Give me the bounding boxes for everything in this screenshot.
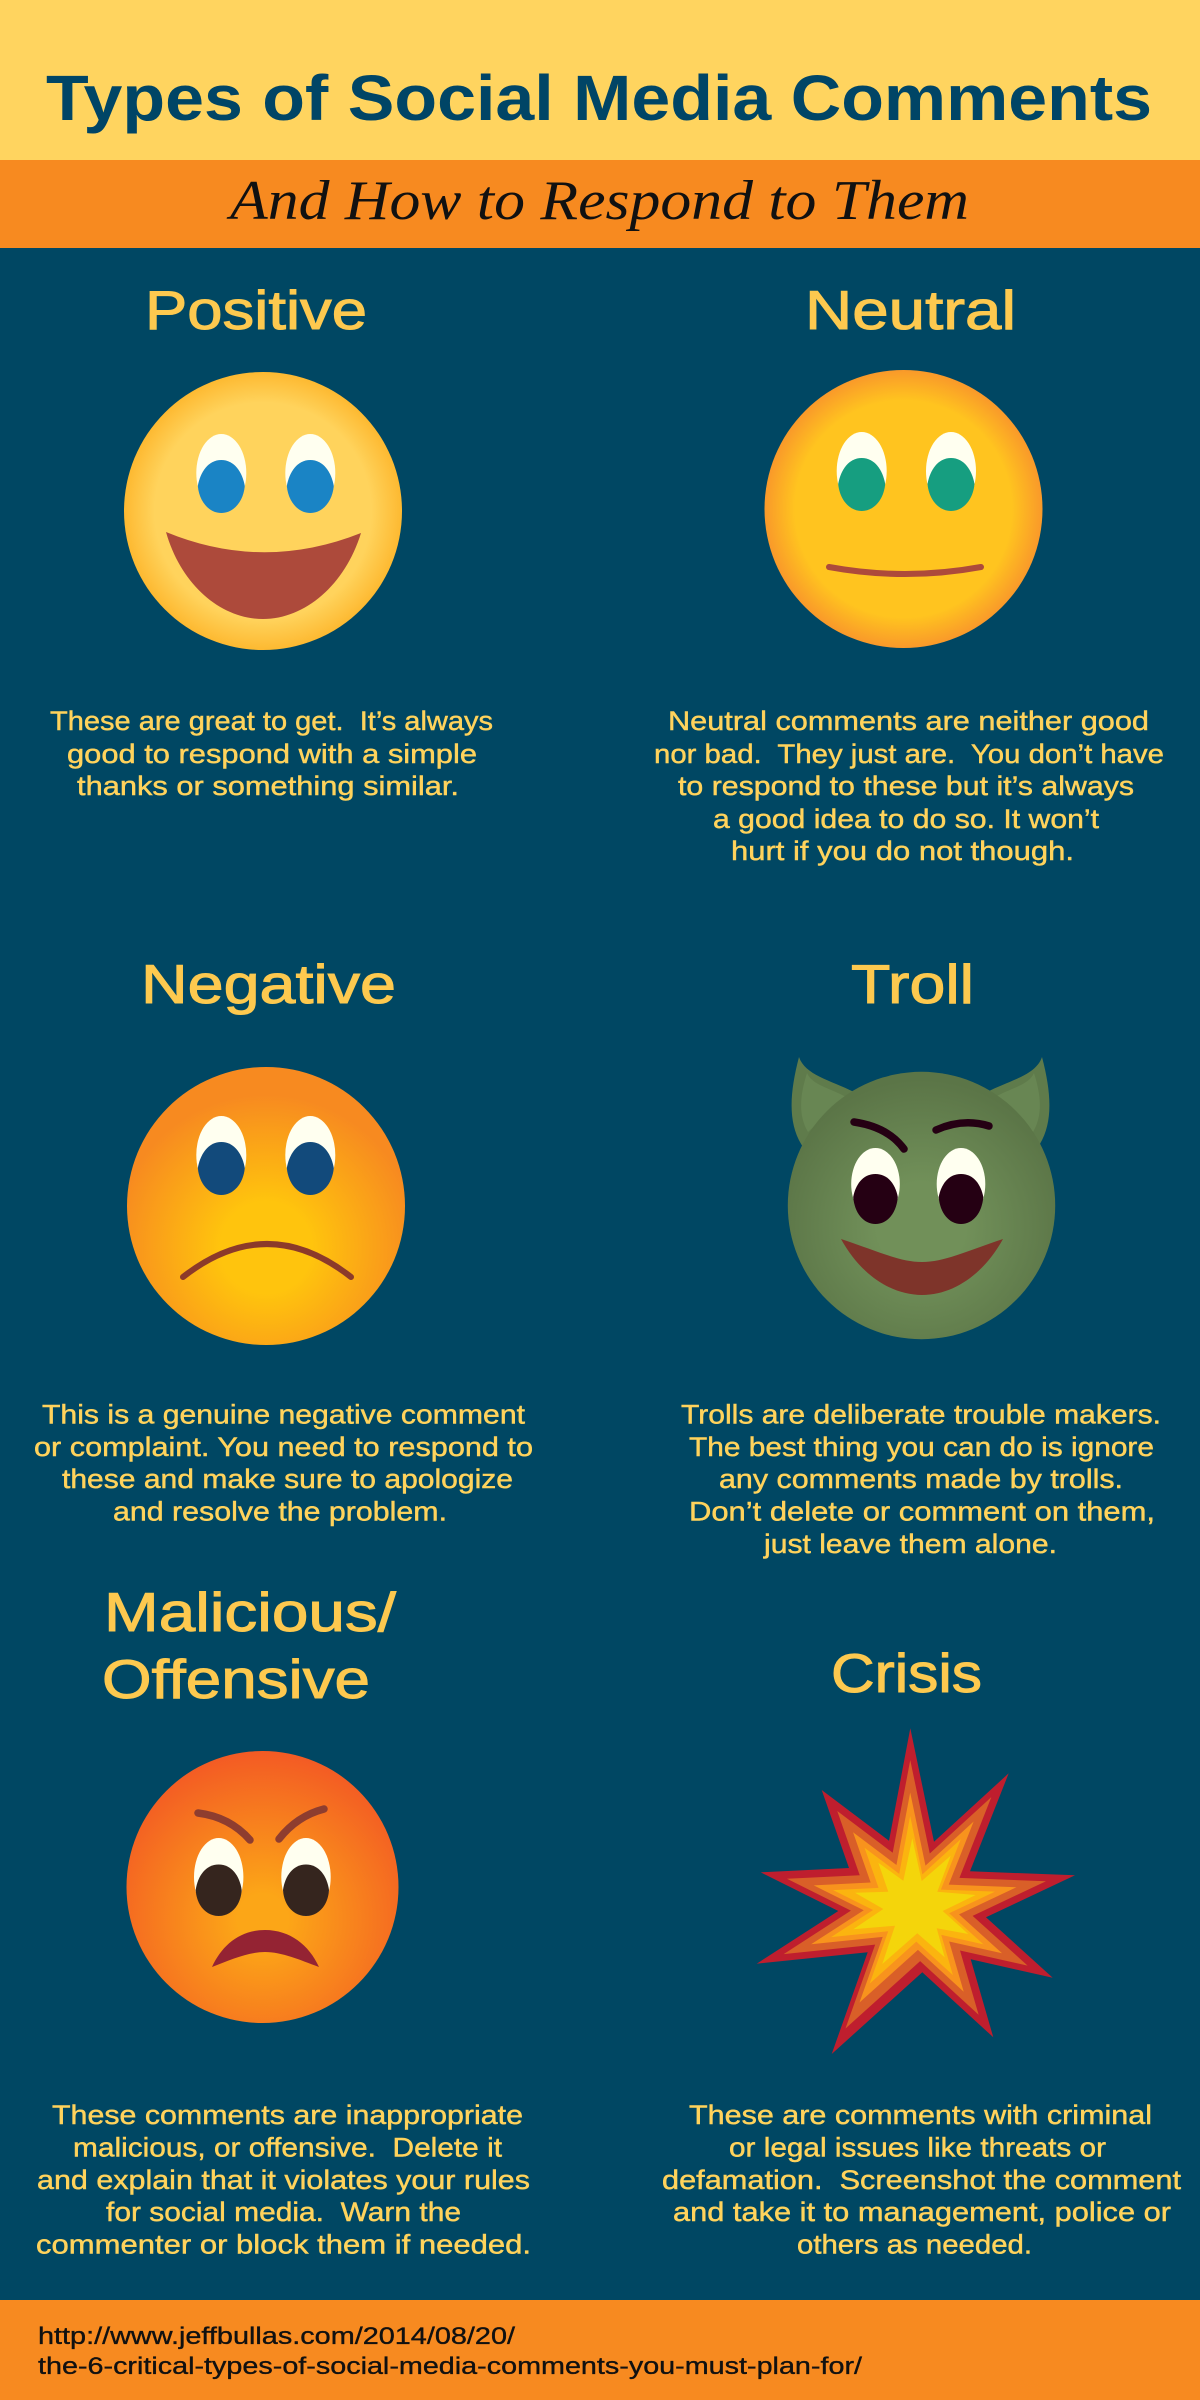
text: malicious description <box>36 2100 531 2260</box>
text: crisis description: or legal issues like threats or <box>729 2132 1106 2162</box>
subtitle band <box>0 160 1200 248</box>
header band <box>0 0 1200 160</box>
text: crisis description: defamation. Screenshot the comment <box>662 2165 1182 2195</box>
text: troll description: The best thing you can do is ignore <box>689 1432 1154 1462</box>
heading: negative: Negative <box>141 953 396 1015</box>
text: neutral description <box>654 706 1164 866</box>
panel: negative <box>34 953 533 1526</box>
text: neutral description: Neutral comments are neither good <box>668 706 1149 736</box>
text: crisis description: others as needed. <box>797 2230 1032 2260</box>
text: positive description: thanks or something similar. <box>77 771 459 801</box>
text: negative description <box>34 1400 533 1526</box>
text: neutral description: hurt if you do not though. <box>731 836 1074 866</box>
heading: troll: Troll <box>851 953 974 1015</box>
subtitle: And How to Respond to Them <box>226 170 969 232</box>
text: malicious description: malicious, or offensive. Delete it <box>73 2132 503 2162</box>
heading: positive: Positive <box>145 279 367 341</box>
text: troll description: Don’t delete or comment on them, <box>689 1496 1155 1526</box>
text: troll description: any comments made by trolls. <box>719 1464 1123 1494</box>
text: negative description: This is a genuine negative comment <box>42 1400 526 1430</box>
text: malicious description: for social media. Warn the <box>106 2197 461 2227</box>
footer band <box>0 2300 1200 2400</box>
icon: angry face <box>126 1751 398 2023</box>
text: neutral description: a good idea to do so. It won’t <box>713 804 1100 834</box>
text: positive description <box>50 706 493 801</box>
source url <box>38 2323 862 2380</box>
heading: neutral: Neutral <box>805 279 1016 341</box>
heading: malicious offensive: Malicious/ <box>104 1581 397 1643</box>
heading: malicious offensive <box>102 1581 397 1710</box>
heading: crisis: Crisis <box>831 1642 982 1704</box>
panel: neutral <box>654 279 1164 866</box>
icon: explosion star <box>757 1728 1075 2054</box>
source url: the-6-critical-types-of-social-media-comments-you-must-plan-for/ <box>38 2353 862 2380</box>
panel: troll <box>681 953 1161 1559</box>
text: crisis description: These are comments with criminal <box>689 2100 1152 2130</box>
text: positive description: good to respond with a simple <box>67 739 477 769</box>
icon: neutral face <box>764 370 1042 648</box>
title: Types of Social Media Comments <box>46 62 1152 134</box>
text: neutral description: to respond to these but it’s always <box>678 771 1134 801</box>
text: neutral description: nor bad. They just are. You don’t have <box>654 739 1164 769</box>
text: negative description: these and make sure to apologize <box>62 1464 513 1494</box>
icon: troll face <box>788 1057 1055 1339</box>
panel: positive <box>50 279 493 801</box>
text: malicious description: and explain that it violates your rules <box>37 2165 530 2195</box>
panel: malicious / offensive <box>36 1581 531 2260</box>
text: crisis description: and take it to management, police or <box>673 2197 1171 2227</box>
text: troll description: Trolls are deliberate trouble makers. <box>681 1400 1161 1430</box>
icon: sad face <box>127 1067 405 1345</box>
text: troll description <box>681 1400 1161 1559</box>
panel: crisis <box>662 1642 1182 2260</box>
text: crisis description <box>662 2100 1182 2260</box>
heading: malicious offensive: Offensive <box>102 1648 370 1710</box>
text: positive description: These are great to get. It’s always <box>50 706 493 736</box>
source url: http://www.jeffbullas.com/2014/08/20/ <box>38 2323 515 2350</box>
text: malicious description: commenter or block them if needed. <box>36 2230 531 2260</box>
text: negative description: and resolve the problem. <box>113 1496 447 1526</box>
text: negative description: or complaint. You need to respond to <box>34 1432 533 1462</box>
text: malicious description: These comments are inappropriate <box>52 2100 523 2130</box>
text: troll description: just leave them alone. <box>763 1529 1057 1559</box>
icon: smiling face <box>124 372 402 650</box>
